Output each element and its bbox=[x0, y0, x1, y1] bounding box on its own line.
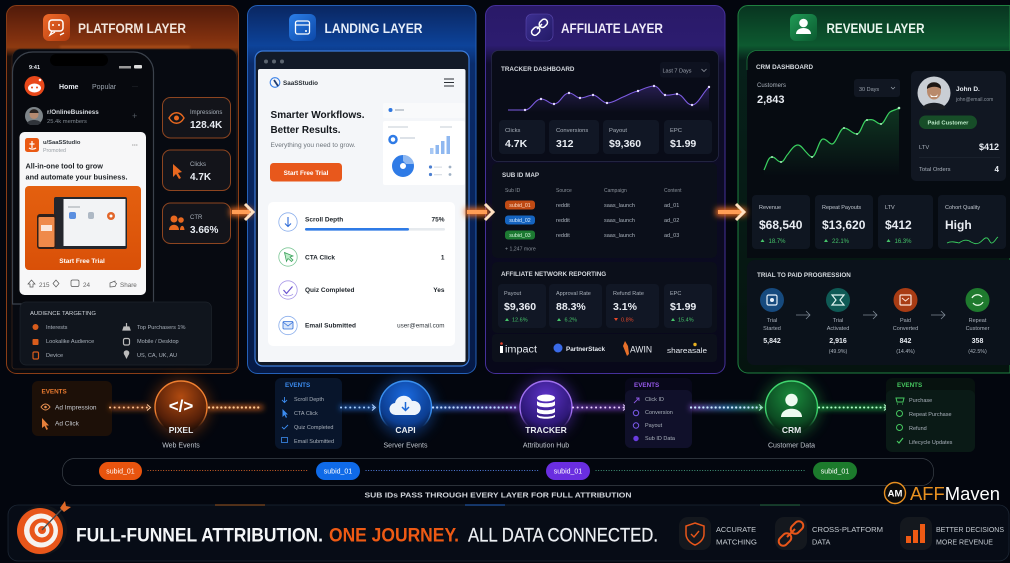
metric: email submitted: Email Submitted bbox=[305, 322, 356, 330]
node: tracker bbox=[516, 377, 576, 450]
icon: target bbox=[17, 501, 71, 555]
pill: blue subid bbox=[316, 462, 360, 480]
ad image bbox=[25, 186, 141, 270]
events box: tracker: Conversion bbox=[645, 410, 673, 416]
network logos: PartnerStack bbox=[566, 346, 606, 353]
brand logo bbox=[270, 78, 318, 87]
node: capi bbox=[376, 377, 436, 450]
badge: better decisions: BETTER DECISIONS bbox=[936, 525, 1004, 534]
audience targeting panel: Lookalike Audience bbox=[46, 339, 94, 345]
sub id map: Campaign bbox=[604, 188, 627, 194]
pill: purple subid: subid_01 bbox=[554, 468, 582, 476]
stat: epc: $1.99 bbox=[670, 138, 696, 150]
report: approval rate bbox=[549, 284, 602, 328]
audience targeting panel: AUDIENCE TARGETING bbox=[30, 311, 96, 317]
post actions: Share bbox=[120, 282, 137, 289]
metric card: impressions: Impressions bbox=[190, 110, 222, 116]
phone mockup bbox=[12, 52, 230, 365]
node: capi: CAPI bbox=[395, 425, 416, 435]
events box: capi: CTA Click bbox=[294, 411, 318, 417]
metric: cta click: CTA Click bbox=[305, 254, 335, 262]
headline bbox=[76, 524, 658, 546]
customer profile card: Total Orders bbox=[919, 167, 951, 173]
kpi: repeat payouts bbox=[815, 195, 873, 249]
metric card: clicks bbox=[162, 150, 230, 190]
brand logo: SaaSStudio bbox=[283, 80, 318, 87]
events box: pixel: EVENTS bbox=[42, 388, 67, 396]
table row subid_01: subid_01 bbox=[509, 203, 531, 209]
metric card: ctr: CTR bbox=[190, 215, 203, 221]
sub id map: Sub ID bbox=[505, 188, 521, 194]
tracking metrics card bbox=[268, 202, 455, 346]
badge: accurate matching: ACCURATE bbox=[716, 525, 756, 534]
events box: crm: Repeat Purchase bbox=[909, 412, 952, 418]
table row subid_03 bbox=[505, 230, 679, 240]
step: repeat customer: Customer bbox=[966, 326, 990, 332]
headline: FULL-FUNNEL ATTRIBUTION. bbox=[76, 524, 323, 546]
area chart bbox=[764, 107, 900, 176]
table row subid_02: saas_launch bbox=[604, 218, 635, 224]
step: repeat customer: Repeat bbox=[969, 318, 987, 324]
events box: tracker: Payout bbox=[645, 423, 663, 429]
caption: SUB IDs PASS THROUGH EVERY LAYER FOR FULL ATTRIBUTION bbox=[364, 490, 632, 500]
heading: landing layer: LANDING LAYER bbox=[324, 21, 423, 36]
flow: events to crm bbox=[690, 404, 763, 410]
tracker dashboard: Last 7 Days bbox=[662, 68, 692, 74]
events box: capi: Quiz Completed bbox=[294, 425, 333, 431]
metric: email submitted bbox=[279, 316, 444, 335]
events box: crm bbox=[886, 378, 975, 452]
report: epc: $1.99 bbox=[670, 301, 696, 313]
dashboard illustration bbox=[383, 103, 465, 185]
promoted post card: Promoted bbox=[43, 148, 66, 154]
pill: orange subid bbox=[99, 462, 142, 480]
arrow bbox=[931, 311, 945, 319]
phone mockup: ··· bbox=[132, 84, 138, 90]
customer profile card: john@email.com bbox=[955, 97, 993, 103]
pill: purple subid bbox=[546, 462, 590, 480]
stat: payout: $9,360 bbox=[609, 138, 641, 150]
metric card: ctr: 3.66% bbox=[190, 225, 218, 236]
post actions bbox=[28, 280, 137, 289]
metric card: impressions bbox=[162, 98, 230, 138]
step: repeat customer bbox=[966, 288, 990, 355]
stat: payout: Payout bbox=[609, 128, 627, 134]
badge: accurate matching: MATCHING bbox=[716, 538, 757, 546]
flow: pixel to capi bbox=[208, 406, 263, 409]
table row subid_01 bbox=[505, 200, 679, 210]
arrow bbox=[796, 311, 810, 319]
badge: cross-platform data bbox=[775, 517, 883, 550]
ad image: Start Free Trial bbox=[59, 258, 105, 265]
step: trial started: Trial bbox=[767, 318, 777, 324]
stat: epc bbox=[664, 120, 712, 154]
step: trial started: 5,842 bbox=[763, 338, 781, 345]
promoted post card bbox=[20, 132, 146, 295]
flow: events to pixel bbox=[110, 404, 150, 410]
avatar: john bbox=[918, 76, 950, 110]
phone mockup: r/OnlineBusiness bbox=[47, 109, 99, 116]
hero headline: Smarter Workflows. bbox=[270, 110, 365, 121]
arrow: landing to affiliate bbox=[465, 204, 493, 220]
kpi: repeat payouts: 22.1% bbox=[832, 239, 850, 245]
phone mockup: 25.4k members bbox=[47, 119, 87, 125]
sub id map: + 1,247 more bbox=[505, 246, 536, 252]
step: trial activated: 2,916 bbox=[829, 338, 847, 345]
panel: revenue layer bbox=[738, 6, 1010, 373]
cta button: Start Free Trial bbox=[284, 170, 329, 177]
promoted post card: u/SaaSStudio bbox=[43, 140, 81, 146]
icon: avatar bbox=[25, 107, 43, 125]
logo: affmaven: AFFMaven bbox=[910, 483, 1000, 504]
metric: quiz completed: Yes bbox=[433, 287, 445, 294]
kpi: cohort quality bbox=[938, 195, 1006, 249]
trial to paid progression: TRIAL TO PAID PROGRESSION bbox=[757, 272, 851, 279]
pill: orange subid: subid_01 bbox=[106, 468, 135, 476]
kpi: ltv bbox=[878, 195, 933, 249]
report: payout: Payout bbox=[504, 291, 522, 297]
node: crm: Customer Data bbox=[768, 442, 815, 450]
icon: reddit logo bbox=[24, 76, 44, 96]
hero headline: Everything you need to grow. bbox=[270, 143, 356, 149]
arrow: platform to landing bbox=[230, 204, 253, 220]
stat: clicks: 4.7K bbox=[505, 138, 528, 150]
tracker dashboard: TRACKER DASHBOARD bbox=[501, 66, 575, 73]
metric card: clicks: 4.7K bbox=[190, 172, 212, 183]
subid pass-through track bbox=[62, 458, 934, 486]
table row subid_03: reddit bbox=[556, 233, 570, 239]
report: approval rate: 88.3% bbox=[556, 301, 586, 313]
report: payout: $9,360 bbox=[504, 301, 536, 313]
metric: scroll depth: 75% bbox=[431, 216, 445, 224]
table row subid_02: reddit bbox=[556, 218, 570, 224]
step: paid converted: Paid bbox=[900, 318, 911, 324]
kpi: ltv: $412 bbox=[885, 218, 912, 232]
table row subid_01: saas_launch bbox=[604, 203, 635, 209]
step: repeat customer: (42.5%) bbox=[968, 349, 987, 355]
promoted post card: All-in-one tool to grow bbox=[26, 162, 103, 170]
cta button bbox=[270, 163, 342, 182]
stat: payout bbox=[603, 120, 659, 154]
kpi: cohort quality: High bbox=[945, 218, 972, 232]
report: epc: 15.4% bbox=[678, 318, 694, 324]
node: capi: Server Events bbox=[384, 442, 428, 450]
customer profile card: Paid Customer bbox=[928, 120, 969, 126]
icon: landing window bbox=[289, 14, 316, 41]
events box: pixel: Ad Click bbox=[55, 420, 80, 428]
browser mockup bbox=[255, 51, 469, 366]
stat: epc: EPC bbox=[670, 128, 682, 134]
stat: conversions: Conversions bbox=[556, 128, 588, 134]
trial to paid progression bbox=[747, 260, 1010, 365]
step: trial activated bbox=[826, 288, 850, 355]
events box: capi: Scroll Depth bbox=[294, 397, 324, 403]
events box: pixel bbox=[32, 381, 112, 436]
step: paid converted: 842 bbox=[900, 338, 911, 345]
step: paid converted: Converted bbox=[893, 326, 918, 332]
heading: platform layer: PLATFORM LAYER bbox=[78, 21, 186, 36]
phone mockup: Popular bbox=[92, 84, 117, 91]
node: pixel: Web Events bbox=[162, 442, 200, 450]
events box: tracker: EVENTS bbox=[634, 382, 659, 389]
icon: revenue user bbox=[790, 14, 817, 41]
heading: affiliate layer: AFFILIATE LAYER bbox=[561, 21, 663, 36]
stat: clicks bbox=[499, 120, 545, 154]
sub id map: Content bbox=[664, 188, 682, 194]
customer profile card: 4 bbox=[995, 165, 1000, 174]
report: epc: EPC bbox=[670, 291, 681, 297]
flow: capi to tracker bbox=[432, 406, 519, 409]
crm dashboard: 2,843 bbox=[757, 94, 785, 106]
table row subid_02 bbox=[505, 216, 679, 224]
metric card: impressions: 128.4K bbox=[190, 120, 223, 131]
badge: cross-platform data: CROSS-PLATFORM bbox=[812, 525, 883, 534]
kpi: revenue: Revenue bbox=[759, 205, 781, 211]
metric card: ctr bbox=[162, 203, 230, 244]
events box: tracker: Click ID bbox=[645, 397, 664, 403]
pill: green subid: subid_01 bbox=[821, 468, 849, 476]
hero headline bbox=[270, 110, 365, 149]
table row subid_03: subid_03 bbox=[509, 233, 531, 239]
events box: crm: Refund bbox=[909, 426, 927, 432]
flow: crm to events bbox=[818, 404, 888, 410]
sub id map: SUB ID MAP bbox=[502, 172, 539, 179]
events box: capi: Email Submitted bbox=[294, 439, 334, 445]
badge: better decisions bbox=[900, 517, 1004, 550]
audience targeting panel bbox=[20, 302, 212, 365]
bottom banner bbox=[8, 501, 1009, 561]
events box: pixel: Ad Impression bbox=[55, 404, 97, 412]
pill: green subid bbox=[813, 462, 857, 480]
promoted post card: and automate your business. bbox=[26, 172, 128, 182]
panel: landing layer bbox=[248, 6, 476, 374]
affiliate network reporting bbox=[492, 262, 717, 333]
node: pixel: PIXEL bbox=[169, 425, 193, 435]
step: trial activated: Trial bbox=[833, 318, 843, 324]
events box: capi: EVENTS bbox=[285, 382, 310, 389]
line chart bbox=[508, 85, 710, 112]
crm dashboard: CRM DASHBOARD bbox=[756, 64, 813, 71]
sub id map bbox=[492, 163, 717, 258]
events box: crm: Purchase bbox=[909, 398, 932, 404]
step: trial started: Started bbox=[763, 326, 781, 332]
metric: cta click: 1 bbox=[441, 254, 445, 262]
affiliate network reporting: AFFILIATE NETWORK REPORTING bbox=[501, 271, 606, 278]
pill: blue subid: subid_01 bbox=[324, 468, 352, 476]
headline: ONE JOURNEY. bbox=[329, 524, 459, 546]
kpi: repeat payouts: Repeat Payouts bbox=[822, 205, 861, 211]
step: trial activated: (49.9%) bbox=[829, 349, 848, 355]
events box: crm: EVENTS bbox=[897, 382, 922, 389]
kpi: ltv: 16.3% bbox=[894, 239, 912, 245]
report: approval rate: 6.2% bbox=[564, 318, 577, 324]
phone mockup: Home bbox=[59, 84, 79, 91]
metric: cta click bbox=[279, 248, 445, 266]
flow: events to capi bbox=[340, 404, 376, 410]
network logos: AWIN bbox=[630, 344, 652, 354]
audience targeting panel: Interests bbox=[46, 325, 68, 331]
step: paid converted: (14.4%) bbox=[896, 349, 915, 355]
kpi: cohort quality: Cohort Quality bbox=[945, 205, 980, 211]
metric: quiz completed: Quiz Completed bbox=[305, 287, 355, 294]
badge: accurate matching bbox=[679, 517, 757, 550]
step: paid converted bbox=[893, 288, 918, 355]
stat: clicks: Clicks bbox=[505, 128, 521, 134]
logo: affmaven: AM bbox=[888, 488, 902, 500]
audience targeting panel: Device bbox=[46, 353, 63, 359]
badge: better decisions: MORE REVENUE bbox=[936, 538, 993, 546]
phone mockup: 9:41 bbox=[29, 65, 40, 71]
hero headline: Better Results. bbox=[270, 125, 341, 136]
table row subid_02: ad_02 bbox=[664, 218, 679, 224]
post actions: 215 bbox=[39, 282, 50, 289]
table row subid_01: reddit bbox=[556, 203, 570, 209]
promoted post card: ··· bbox=[132, 143, 138, 149]
network logos: impact bbox=[505, 344, 537, 356]
node: pixel: </> bbox=[169, 396, 193, 416]
audience targeting panel: Top Purchasers 1% bbox=[137, 325, 186, 331]
metric: scroll depth: Scroll Depth bbox=[305, 216, 343, 224]
report: refund rate bbox=[606, 284, 659, 328]
report: refund rate: 0.8% bbox=[621, 318, 634, 324]
stat: conversions bbox=[549, 120, 599, 154]
network logos: shareasale bbox=[667, 346, 707, 355]
report: epc bbox=[664, 284, 712, 328]
node: tracker: TRACKER bbox=[525, 425, 567, 435]
report: payout bbox=[498, 284, 546, 328]
metric card: clicks: Clicks bbox=[190, 162, 206, 168]
step: trial activated: Activated bbox=[827, 326, 849, 332]
heading: revenue layer: REVENUE LAYER bbox=[826, 21, 925, 36]
metric: email submitted: user@email.com bbox=[397, 322, 444, 330]
arrow: affiliate to revenue bbox=[716, 204, 746, 220]
events box: crm: Lifecycle Updates bbox=[909, 440, 953, 446]
report: approval rate: Approval Rate bbox=[556, 291, 591, 297]
report: payout: 12.6% bbox=[512, 318, 528, 324]
node: crm bbox=[762, 377, 822, 450]
headline: ALL DATA CONNECTED. bbox=[468, 524, 658, 546]
table row subid_03: ad_03 bbox=[664, 233, 679, 239]
customer profile card: LTV bbox=[919, 145, 929, 151]
events box: capi bbox=[275, 378, 342, 449]
panel: affiliate layer bbox=[486, 6, 725, 374]
customer profile card bbox=[911, 71, 1006, 181]
kpi: ltv: LTV bbox=[885, 205, 895, 211]
report: refund rate: 3.1% bbox=[613, 301, 638, 313]
customer profile card: John D. bbox=[956, 86, 980, 93]
icon: platform chat bbox=[43, 14, 70, 41]
metric: quiz completed bbox=[279, 281, 445, 299]
tracker dashboard bbox=[492, 50, 718, 162]
post actions: 24 bbox=[83, 282, 91, 289]
kpi: revenue: $68,540 bbox=[759, 218, 803, 232]
metric: scroll depth bbox=[279, 213, 445, 231]
badge: cross-platform data: DATA bbox=[812, 538, 831, 546]
crm dashboard: 30 Days bbox=[859, 87, 879, 93]
node: crm: CRM bbox=[782, 425, 801, 435]
events box: tracker: Sub ID Data bbox=[645, 436, 676, 442]
flow: tracker to events bbox=[572, 404, 626, 410]
kpi: revenue: 18.7% bbox=[768, 239, 786, 245]
step: repeat customer: 358 bbox=[972, 338, 983, 345]
crm dashboard bbox=[747, 50, 1010, 258]
phone mockup: + bbox=[132, 111, 137, 121]
table row subid_03: saas_launch bbox=[604, 233, 635, 239]
node: pixel bbox=[151, 377, 211, 450]
arrow bbox=[863, 311, 877, 319]
events box: tracker bbox=[625, 378, 692, 448]
network logos bbox=[492, 334, 717, 362]
node: tracker: Attribution Hub bbox=[523, 442, 569, 450]
table row subid_01: ad_01 bbox=[664, 203, 679, 209]
kpi: revenue bbox=[752, 195, 810, 249]
report: refund rate: Refund Rate bbox=[613, 291, 644, 297]
stat: conversions: 312 bbox=[556, 138, 574, 150]
icon: affiliate link bbox=[526, 14, 553, 41]
kpi: repeat payouts: $13,620 bbox=[822, 218, 866, 232]
customer profile card: $412 bbox=[979, 142, 999, 152]
audience targeting panel: Mobile / Desktop bbox=[137, 339, 179, 345]
step: trial started bbox=[760, 288, 784, 345]
table row subid_02: subid_02 bbox=[509, 218, 531, 224]
audience targeting panel: US, CA, UK, AU bbox=[137, 353, 177, 359]
sub id map: Source bbox=[556, 188, 572, 194]
crm dashboard: Customers bbox=[757, 83, 786, 89]
